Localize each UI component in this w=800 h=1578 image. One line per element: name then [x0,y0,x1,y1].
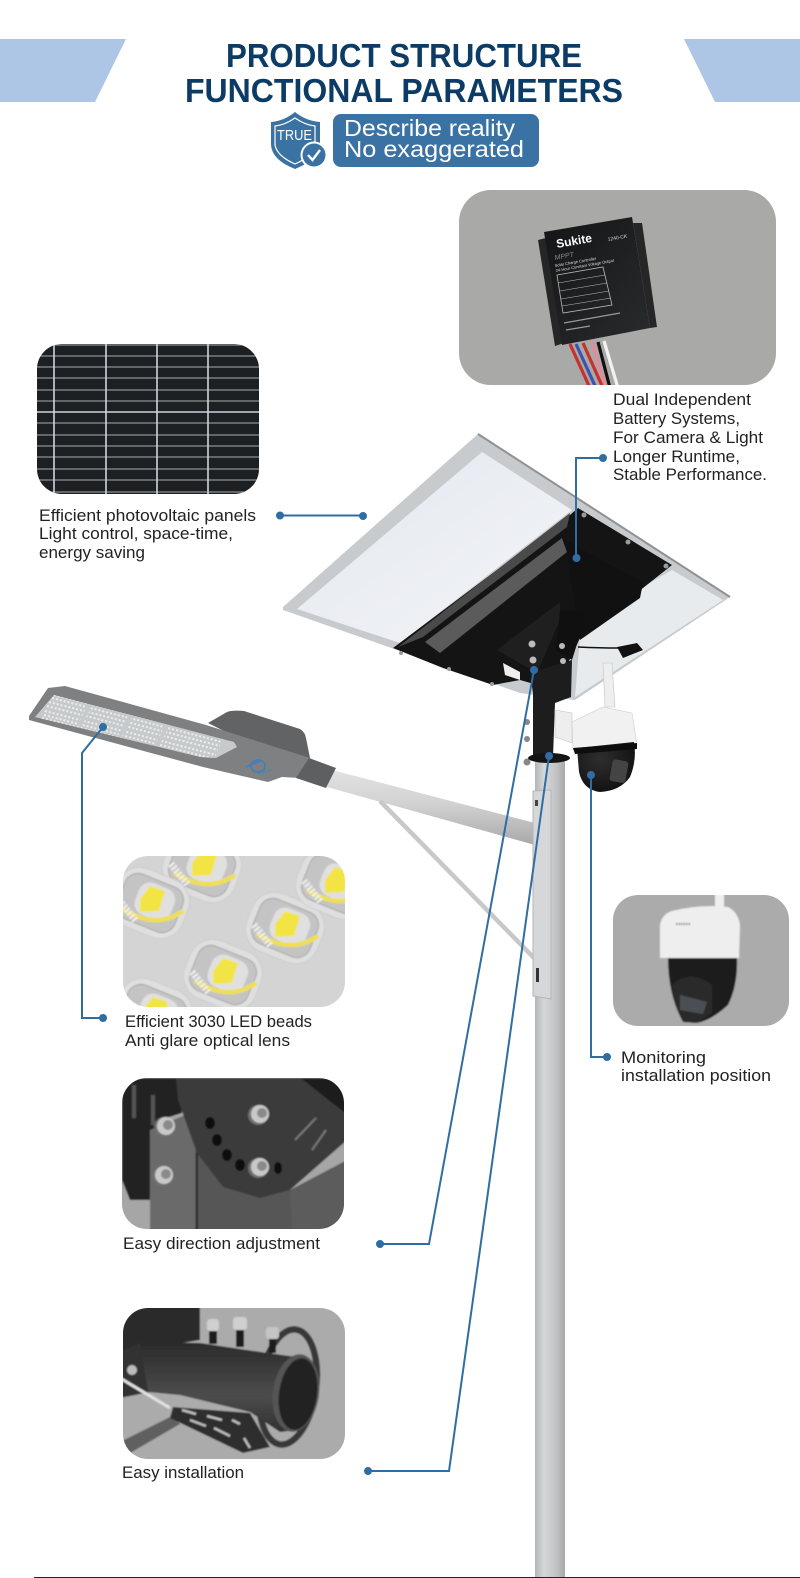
panel: direction adjustment photo [119,1075,347,1232]
battery box [562,538,643,640]
solar panel assembly [283,434,730,700]
caption: LED beads: Anti glare optical lens [125,1032,290,1050]
wires [570,341,618,388]
black mounting plate [393,508,672,690]
leader: camera [588,772,610,1060]
bolts [399,512,668,686]
street light head: KAIYOU [257,767,273,776]
leader: photovoltaic panels [277,512,366,519]
panel: easy installation photo [120,1305,348,1462]
caption: LED beads [125,1013,312,1050]
caption: photovoltaic panels: energy saving [39,544,145,562]
leader: controller [574,455,606,561]
caption: controller: For Camera & Light [613,429,763,447]
icon: TRUE shield with check: TRUE [277,127,312,144]
mount plate [533,790,551,999]
title: FUNCTIONAL PARAMETERS [185,72,623,109]
header ribbon: left [0,39,126,102]
controller body: Solar Charge Controller [554,256,597,268]
pole [535,755,565,1578]
controller body [538,217,657,346]
caption: controller [613,391,767,484]
title: PRODUCT STRUCTURE [226,37,582,74]
title [185,37,623,109]
caption: photovoltaic panels [39,507,256,562]
panel: solar controller photo [459,190,776,388]
caption: easy installation: Easy installation [122,1464,244,1482]
glass [297,452,572,643]
caption: controller: Stable Performance. [613,466,767,484]
camera [555,663,637,792]
logo mark [246,760,265,772]
leader: direction adjustment [377,667,537,1247]
side strips [398,513,570,647]
caption: photovoltaic panels: Light control, space-time, [39,525,233,543]
icon: TRUE shield with check [271,112,328,169]
street light arm [327,770,551,999]
controller body: MPPT [554,252,575,262]
brace [380,801,539,963]
controller body: 1240-CK [607,234,628,243]
connector [296,758,336,788]
frame [283,434,730,700]
panel: photovoltaic cell photo [37,344,259,494]
badge: describe reality [333,114,539,167]
lens with LEDs [35,695,237,758]
cable and plug [578,647,618,648]
leader: easy installation [365,753,552,1474]
mounting bracket and neck [497,602,587,766]
panel: camera photo [610,890,792,1029]
caption: camera position: installation position [621,1067,771,1085]
controller body: Sukite [555,231,593,251]
leader: LED beads [82,724,106,1021]
caption: controller: Longer Runtime, [613,448,740,466]
street light head [29,686,336,788]
caption: controller: Battery Systems, [613,410,740,428]
panel: LED beads photo [123,856,345,1007]
caption: controller: Dual Independent [613,391,751,409]
driver box [208,711,310,764]
badge: describe reality: Describe reality [344,115,516,141]
header ribbon: right [684,39,800,102]
caption: photovoltaic panels: Efficient photovoltaic panels [39,507,256,525]
caption: LED beads: Efficient 3030 LED beads [125,1013,312,1031]
caption: direction adjustment: Easy direction adjustment [123,1235,320,1253]
caption: camera position [621,1049,771,1085]
badge: describe reality: No exaggerated [344,136,524,162]
controller body: 24-Hour Constant Voltage Output [555,258,615,273]
caption: camera position: Monitoring [621,1049,706,1067]
